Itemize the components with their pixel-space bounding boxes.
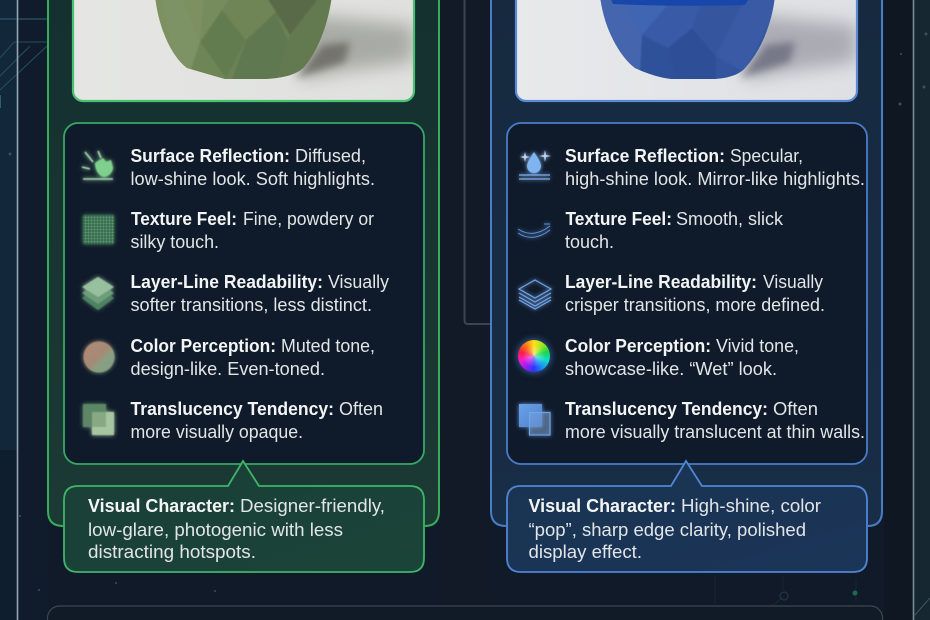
icon: crisp layers bbox=[519, 280, 551, 309]
properties panel: matte bbox=[64, 123, 424, 464]
text: color perception: design-like. Even-toned. bbox=[130, 358, 325, 379]
callout: glossy visual character bbox=[507, 461, 867, 572]
callout: matte visual character: distracting hotspots. bbox=[88, 541, 256, 562]
text: texture feel: Texture Feel: bbox=[131, 208, 237, 229]
text: surface reflection bbox=[565, 145, 865, 189]
callout: matte visual character: low-glare, photogenic with less bbox=[88, 519, 343, 540]
text: surface reflection: high-shine look. Mirror-like highlights. bbox=[565, 168, 865, 189]
bottom panel bbox=[48, 606, 882, 620]
text: layer-line readability: Layer-Line Readability: bbox=[565, 271, 757, 292]
text: translucency tendency: Often bbox=[339, 398, 383, 419]
icon: soft layers bbox=[82, 277, 114, 310]
photo frame bbox=[516, 0, 857, 101]
icon: vivid colour wheel bbox=[518, 340, 550, 372]
text: translucency tendency: more visually translucent at thin walls. bbox=[565, 421, 865, 442]
text: translucency tendency bbox=[130, 398, 383, 442]
text: color perception bbox=[565, 335, 799, 379]
panel: glossy (blue) bbox=[491, 0, 882, 526]
text: translucency tendency: more visually opaque. bbox=[130, 421, 303, 442]
text: color perception: Muted tone, bbox=[281, 335, 375, 356]
icon: diffused reflection bbox=[82, 151, 113, 179]
text: surface reflection bbox=[130, 145, 375, 189]
callout: glossy visual character: “pop”, sharp edge clarity, polished bbox=[528, 519, 806, 540]
text: translucency tendency: Often bbox=[773, 398, 818, 419]
text: translucency tendency bbox=[565, 398, 865, 442]
callout: glossy visual character: display effect. bbox=[528, 541, 642, 562]
photo: blue glossy vase bbox=[516, 0, 857, 101]
photo frame bbox=[73, 0, 414, 101]
callout: matte visual character: Visual Character: bbox=[88, 495, 235, 516]
callout: glossy visual character: Visual Character: bbox=[528, 495, 676, 516]
callout: glossy visual character: High-shine, color bbox=[681, 495, 821, 516]
text: texture feel: Fine, powdery or bbox=[243, 208, 374, 229]
callout: matte visual character: Designer-friendly, bbox=[240, 495, 385, 516]
panel: matte (green) bbox=[48, 0, 439, 526]
text: layer-line readability: softer transitions, less distinct. bbox=[130, 294, 372, 315]
text: surface reflection: Surface Reflection: bbox=[565, 145, 725, 166]
properties panel: glossy bbox=[507, 123, 867, 464]
icon: specular drop bbox=[519, 150, 551, 179]
text: texture feel: silky touch. bbox=[130, 231, 219, 252]
text: texture feel bbox=[565, 208, 784, 252]
text: layer-line readability: crisper transitions, more defined. bbox=[565, 294, 825, 315]
text: surface reflection: Diffused, bbox=[295, 145, 366, 166]
text: color perception: Color Perception: bbox=[565, 335, 711, 356]
text: surface reflection: Specular, bbox=[730, 145, 803, 166]
text: texture feel bbox=[130, 208, 374, 252]
text: layer-line readability bbox=[130, 271, 390, 315]
text: texture feel: Smooth, slick bbox=[676, 208, 784, 229]
text: texture feel: touch. bbox=[565, 231, 614, 252]
text: layer-line readability: Layer-Line Readability: bbox=[130, 271, 323, 292]
text: layer-line readability bbox=[565, 271, 825, 315]
icon: smooth waves bbox=[518, 224, 550, 237]
text: color perception: showcase-like. “Wet” look. bbox=[565, 358, 777, 379]
text: surface reflection: Surface Reflection: bbox=[130, 145, 290, 166]
callout: matte visual character bbox=[64, 461, 424, 572]
text: texture feel: Texture Feel: bbox=[566, 208, 672, 229]
text: color perception bbox=[130, 335, 375, 379]
text: color perception: Vivid tone, bbox=[716, 335, 799, 356]
icon: opaque squares bbox=[83, 404, 114, 435]
icon: muted colour bbox=[84, 342, 114, 372]
text: translucency tendency: Translucency Tendency: bbox=[565, 398, 768, 419]
photo: green matte vase bbox=[73, 0, 414, 101]
icon: translucent squares bbox=[519, 404, 550, 435]
text: surface reflection: low-shine look. Soft highlights. bbox=[130, 168, 375, 189]
text: layer-line readability: Visually bbox=[763, 271, 824, 292]
text: translucency tendency: Translucency Tendency: bbox=[130, 398, 334, 419]
panel outlines bbox=[48, 0, 882, 526]
icon: powdery texture bbox=[83, 215, 114, 244]
text: layer-line readability: Visually bbox=[328, 271, 390, 292]
text: color perception: Color Perception: bbox=[130, 335, 276, 356]
